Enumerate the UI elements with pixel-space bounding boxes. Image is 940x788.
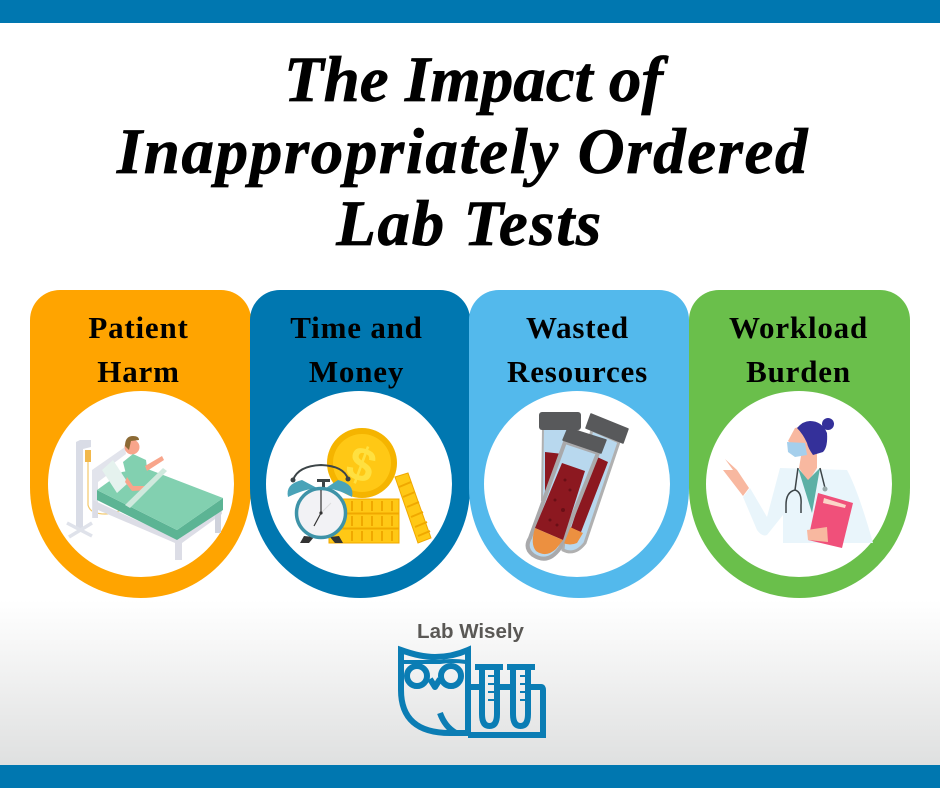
panel: time and money — [250, 290, 470, 598]
circle: wasted resources — [484, 391, 670, 577]
stethoscope — [786, 468, 825, 513]
icon: alarm clock and coins: $ — [340, 436, 383, 495]
panel: workload burden — [689, 290, 910, 598]
heading: patient harm: Patient — [88, 310, 189, 345]
heading: wasted resources: Resources — [507, 354, 648, 389]
hand pointing — [723, 459, 749, 496]
heading: patient harm — [88, 310, 189, 389]
icon: patient in hospital bed — [67, 436, 223, 560]
big coin — [327, 428, 397, 498]
background gradient — [0, 600, 940, 765]
heading: wasted resources: Wasted — [526, 310, 629, 345]
front tube — [528, 442, 598, 559]
panel: wasted resources — [469, 290, 689, 598]
circle: time and money — [266, 391, 452, 577]
coin stacks — [329, 499, 399, 543]
mattress — [97, 490, 223, 540]
pillow — [102, 460, 128, 493]
title: Lab Tests — [335, 188, 603, 260]
heading: workload burden: Workload — [729, 310, 868, 345]
heading: workload burden — [729, 310, 868, 389]
back right tube — [563, 430, 619, 552]
bed frame — [92, 447, 126, 518]
title: Inappropriately Ordered — [116, 116, 809, 188]
logo text: Lab Wisely — [417, 620, 525, 643]
face — [788, 425, 812, 452]
circle: patient harm — [48, 391, 234, 577]
clipboard — [808, 493, 853, 548]
heading: workload burden: Burden — [746, 354, 851, 389]
title — [116, 44, 809, 260]
title: The Impact of — [284, 44, 669, 116]
heading: time and money: Time and — [290, 310, 423, 345]
bottom bar — [0, 765, 940, 788]
neck — [799, 450, 817, 482]
hair — [797, 421, 827, 455]
circle: workload burden — [706, 391, 892, 577]
heading: wasted resources — [507, 310, 648, 389]
top bar — [0, 0, 940, 23]
back left tube — [542, 428, 578, 500]
icon: blood tubes — [528, 412, 628, 559]
logo: owl and test tubes — [401, 650, 543, 735]
heading: time and money: Money — [309, 354, 404, 389]
leaning coin stack — [395, 473, 431, 543]
icon: doctor with clipboard — [723, 418, 873, 548]
hand on clipboard — [807, 527, 828, 542]
heading: time and money — [290, 310, 423, 389]
IV stand — [76, 440, 91, 528]
scrubs — [798, 468, 820, 513]
patient — [124, 440, 140, 454]
heading: patient harm: Harm — [97, 354, 180, 389]
mask — [787, 442, 807, 457]
icon: alarm clock and coins — [288, 428, 431, 543]
panel: patient harm — [30, 290, 251, 598]
lab coat — [743, 468, 873, 543]
clock — [293, 465, 348, 480]
